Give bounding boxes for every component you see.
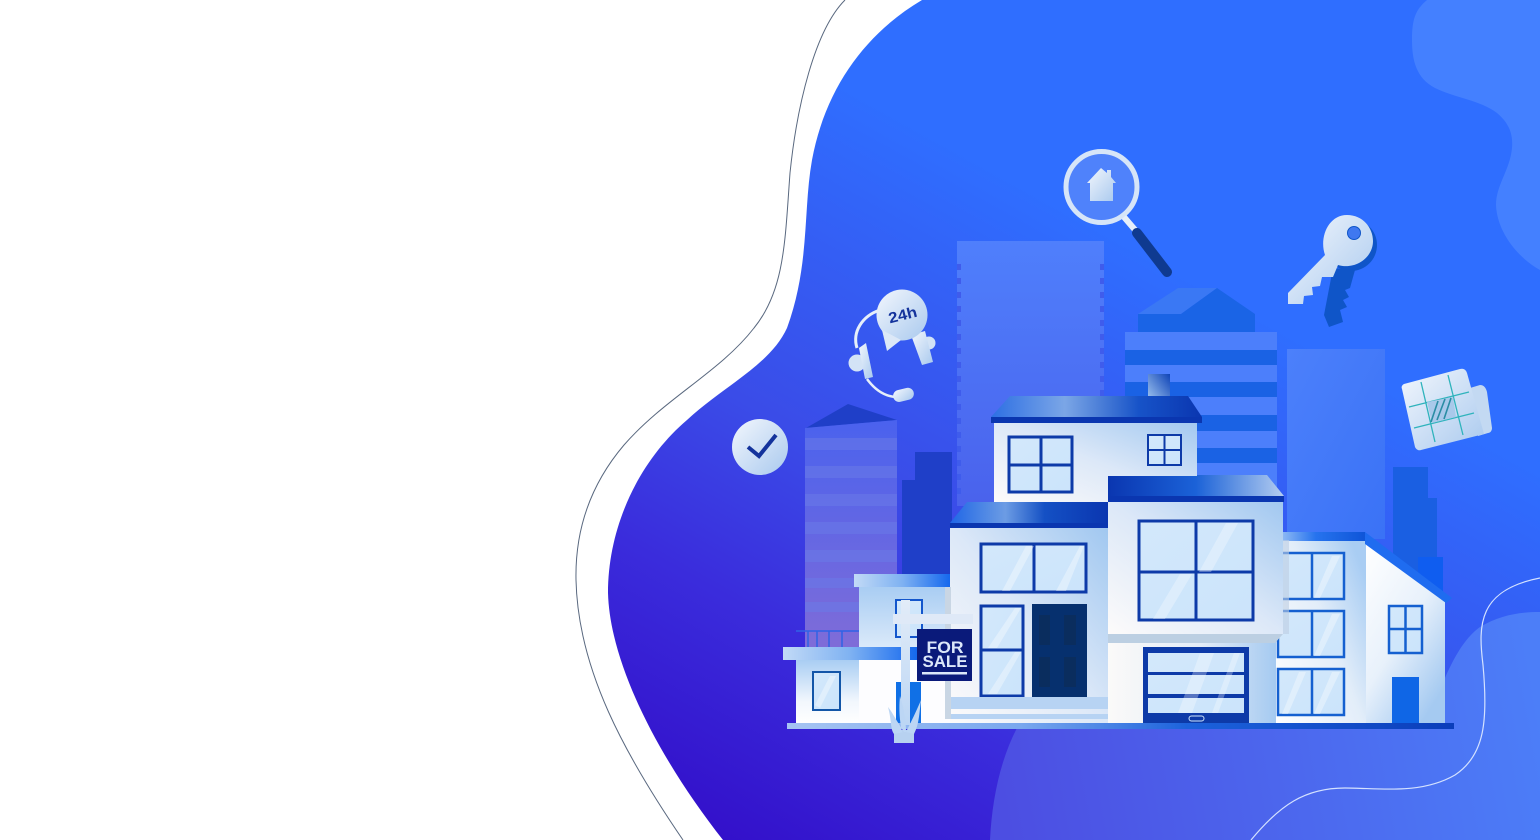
- centre roof: [950, 502, 1108, 528]
- upper window: [1009, 437, 1072, 492]
- house: centre block with door: [950, 502, 1108, 724]
- dark background tower, left: [902, 452, 952, 575]
- icon: check badge: [732, 419, 788, 475]
- pale background tower, far right: [1287, 349, 1385, 539]
- icon: 24h headset: [848, 290, 936, 403]
- house: right annex with pitched roof: [1276, 532, 1452, 724]
- centre windows: [981, 544, 1086, 696]
- dark background tower, far right: [1393, 467, 1437, 600]
- gable roof: [1365, 532, 1452, 603]
- ground line: [787, 723, 1454, 729]
- icon: 24h headset: 24h: [887, 304, 919, 327]
- right block roof: [1108, 475, 1284, 502]
- small bright tower behind gable: [1418, 557, 1443, 597]
- front door: [1032, 604, 1087, 697]
- light blob, top right: [1412, 0, 1540, 270]
- steps: [951, 697, 1108, 719]
- tall background tower, centre: [957, 241, 1104, 506]
- striped background tower, right: [1125, 288, 1277, 532]
- upper roof: [991, 396, 1202, 423]
- chimney: [1148, 374, 1170, 404]
- lilac background tower, left: [805, 404, 897, 648]
- icon: magnifying glass with house: [1066, 152, 1167, 272]
- annex door: [1392, 677, 1419, 723]
- house: right main block: [1108, 475, 1289, 724]
- gable window: [1389, 606, 1422, 653]
- icon: key with shadow: [1288, 215, 1377, 327]
- gable wall: [1366, 543, 1445, 724]
- for sale sign: [893, 600, 973, 725]
- for sale sign: FOR: [926, 639, 964, 657]
- light blob, bottom right: [990, 612, 1540, 840]
- background blob: [608, 0, 1540, 840]
- garage door: [1143, 647, 1249, 723]
- balcony railing: [796, 631, 859, 647]
- plant: [888, 696, 921, 743]
- thin white curve, bottom right: [1251, 578, 1540, 840]
- annex windows: [1278, 553, 1344, 715]
- icon: floor plan sheet: [1402, 369, 1492, 450]
- small upper window: [1148, 435, 1181, 465]
- house: upper storey: [991, 374, 1202, 503]
- thin outline curve, left: [576, 0, 845, 840]
- house: left low building: [783, 574, 951, 724]
- large window: [1139, 521, 1253, 620]
- for sale sign: SALE: [922, 653, 968, 671]
